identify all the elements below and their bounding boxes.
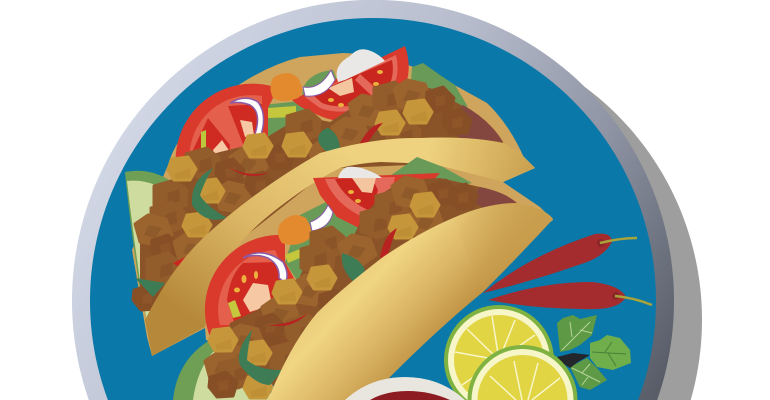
front shell: upper taco — [145, 138, 535, 356]
mozzarella: upper taco — [336, 49, 385, 82]
chilli strip: upper taco — [360, 123, 383, 146]
cilantro leaf: top — [557, 315, 597, 352]
tomato slice: upper taco left — [176, 84, 278, 190]
lime wedge: upper taco — [125, 171, 180, 322]
celery: upper taco — [268, 106, 296, 118]
celery: lower taco — [285, 243, 318, 263]
lettuce: lower taco — [285, 157, 472, 285]
tomato slice: lower taco left — [205, 235, 295, 345]
onion ring: upper taco top — [303, 70, 335, 96]
leaf: lower taco left — [239, 330, 283, 385]
leaf: lower taco right — [342, 253, 365, 283]
lime wedge: lower taco — [173, 328, 275, 400]
lime slice: front — [468, 345, 578, 400]
tomato slice: upper taco right — [292, 46, 409, 122]
leaf: upper taco left — [192, 168, 227, 220]
meat: upper taco — [133, 80, 505, 310]
salsa bowl — [345, 377, 465, 400]
leaf: upper taco right — [318, 128, 340, 158]
meat: lower taco — [205, 177, 517, 398]
mozzarella: lower taco — [338, 167, 382, 178]
tomato slice: lower taco right — [313, 173, 440, 230]
back shell: lower taco — [202, 164, 553, 345]
lower taco — [173, 157, 553, 400]
cilantro — [557, 315, 631, 390]
chilli: upper — [483, 234, 637, 293]
chilli strip: lower taco — [380, 228, 397, 262]
front shell: lower taco — [268, 203, 553, 400]
leaf: upper taco lower — [135, 278, 165, 297]
onion ring: lower taco top — [310, 205, 333, 231]
cilantro leaf: bottom — [570, 358, 607, 390]
lettuce: upper taco — [255, 63, 468, 145]
chilli: lower — [488, 282, 652, 309]
carrot: upper taco — [270, 73, 302, 101]
mozzarella bit: lower taco — [337, 239, 350, 248]
cilantro leaf: right — [590, 335, 631, 370]
upper taco — [125, 46, 553, 356]
lime slice: back — [444, 305, 554, 400]
black stem blob — [557, 353, 590, 368]
chillies — [483, 234, 652, 309]
lime slices — [444, 305, 578, 400]
back shell: upper taco — [132, 53, 525, 356]
carrot: lower taco — [278, 215, 311, 245]
